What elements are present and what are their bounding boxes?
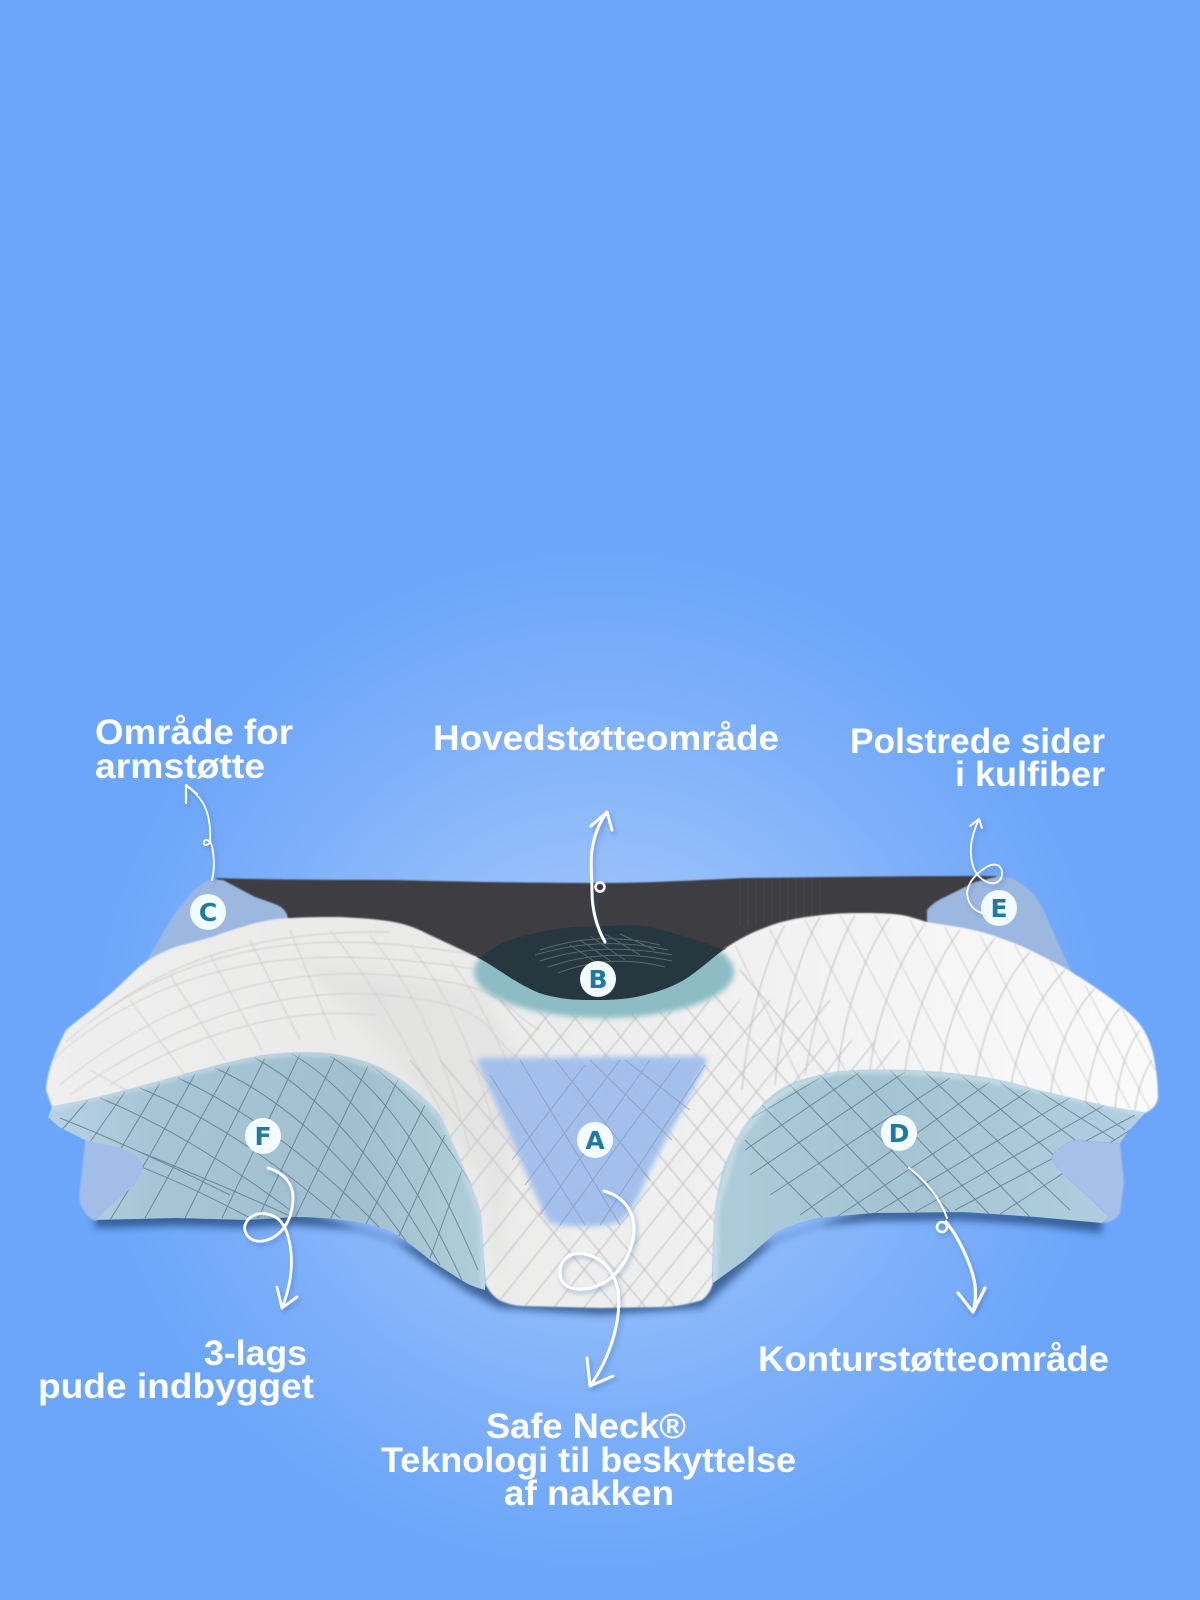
label: padded carbon fibre sides: i kulfiber <box>955 755 1105 794</box>
arrow: D to contour label <box>909 1168 985 1312</box>
label: three-layer pillow: 3-lags <box>204 1334 307 1373</box>
pillow ground shadow <box>95 1206 1102 1315</box>
badge B: B <box>588 965 608 994</box>
arrow: A to safe neck label <box>560 1191 634 1386</box>
arrow: B to head support label <box>591 812 612 942</box>
label: three-layer pillow <box>38 1334 314 1406</box>
panel C: armrest wing <box>143 880 292 975</box>
top light edge F <box>52 1053 485 1290</box>
badge C: C <box>199 898 217 927</box>
panel A: safe neck zone <box>478 1056 707 1226</box>
dark panel texture <box>740 879 820 926</box>
back dark panel <box>215 876 1000 1000</box>
label: head support area: Hovedstøtteområde <box>433 719 779 758</box>
badge E <box>981 890 1017 926</box>
label: arm support area <box>95 713 293 786</box>
quilting lines <box>52 915 1155 1310</box>
badge C <box>190 894 226 930</box>
right pocket <box>1051 1140 1124 1223</box>
badge A: A <box>585 1126 605 1155</box>
badge E: E <box>990 894 1008 923</box>
badge D: D <box>889 1119 909 1148</box>
label: padded carbon fibre sides <box>850 722 1105 794</box>
label: safe neck technology: Safe Neck® <box>486 1407 686 1446</box>
label: arm support area: Område for <box>95 713 293 752</box>
top light edge D <box>714 1071 1145 1285</box>
panel F: three-layer insert <box>40 1045 490 1295</box>
left pocket <box>79 1130 150 1221</box>
panel B: head support zone <box>474 925 734 1018</box>
label: three-layer pillow: pude indbygget <box>38 1367 314 1406</box>
infographic canvas <box>40 618 1159 1506</box>
label: safe neck technology <box>381 1407 796 1513</box>
badge F <box>245 1118 281 1154</box>
badge A <box>577 1122 613 1158</box>
arrow: C to armrest label <box>186 785 214 880</box>
pillow illustration <box>40 876 1158 1315</box>
soft shading on white body <box>300 960 520 1280</box>
label: arm support area: armstøtte <box>95 747 265 786</box>
pillow white body <box>46 913 1158 1310</box>
panel E: carbon fibre side <box>927 877 1073 975</box>
arrow: E to carbon fibre label <box>967 819 1002 913</box>
panel D: contour support <box>713 1070 1145 1283</box>
badge F: F <box>254 1122 272 1151</box>
badge D <box>881 1115 917 1151</box>
badge B <box>580 961 616 997</box>
label: padded carbon fibre sides: Polstrede sider <box>850 722 1105 761</box>
label: safe neck technology: Teknologi til beskyttelse <box>381 1441 796 1480</box>
label: contour support area: Konturstøtteområde <box>758 1340 1109 1379</box>
arrow: F to three-layer label <box>245 1168 297 1308</box>
label: safe neck technology: af nakken <box>504 1474 674 1513</box>
